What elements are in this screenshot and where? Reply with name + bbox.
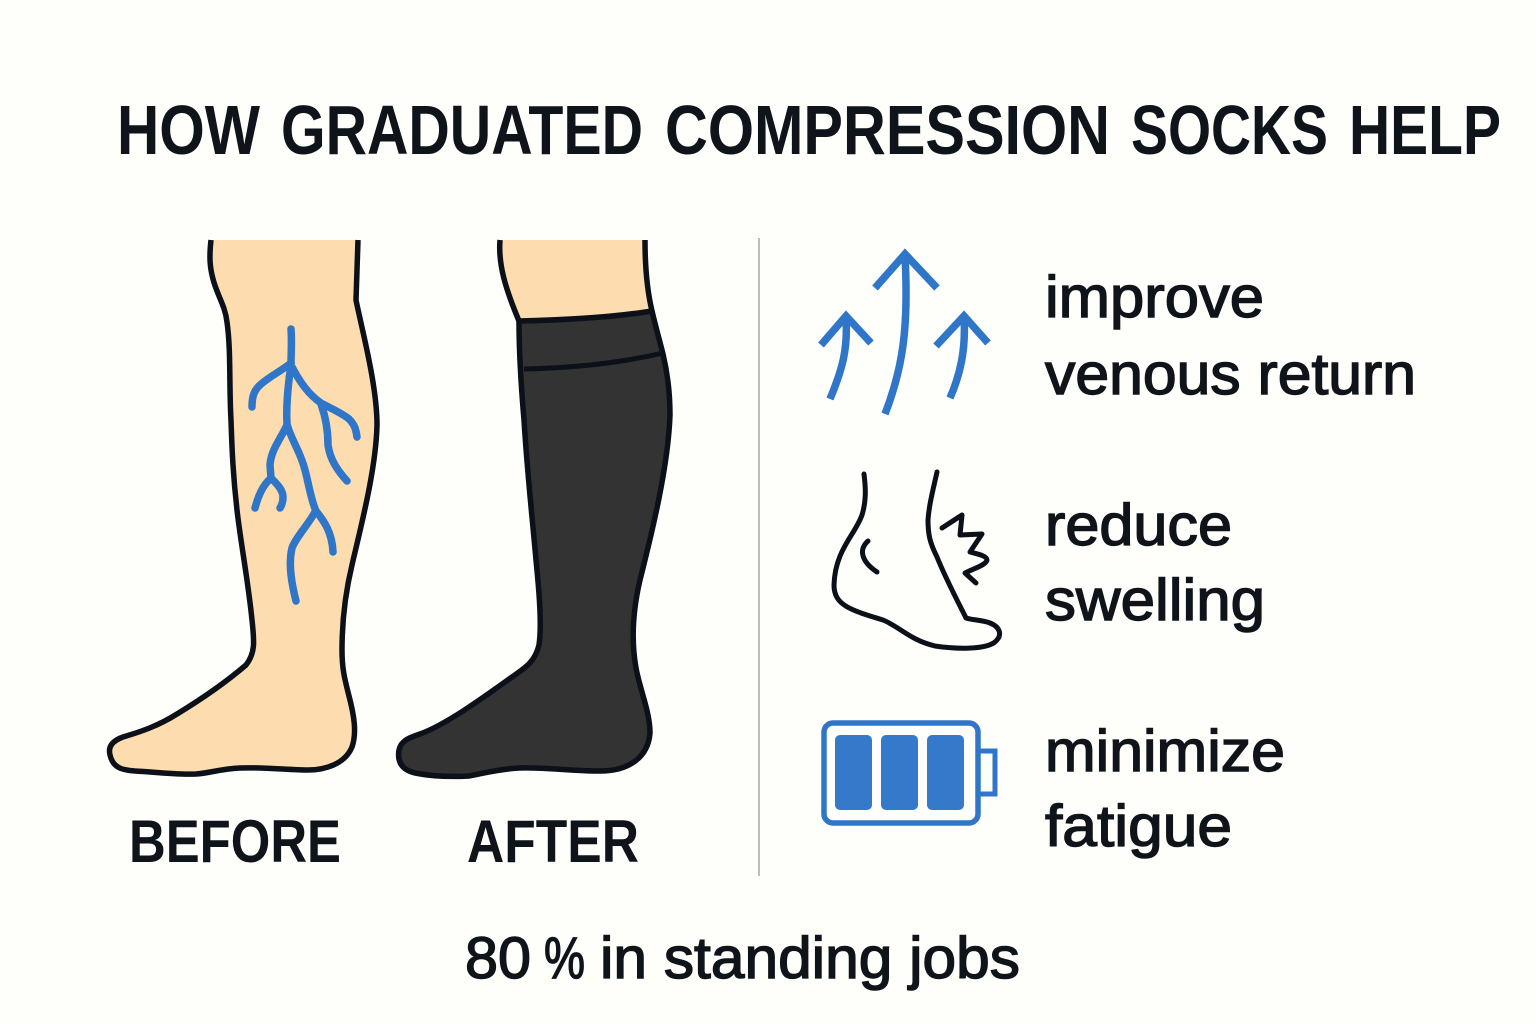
footer statistic: 80 xyxy=(465,926,531,991)
text: improve venous return xyxy=(1045,265,1416,407)
text: reduce swelling xyxy=(1045,493,1265,633)
text: reduce swelling: swelling xyxy=(1045,568,1265,633)
icon: battery xyxy=(824,723,995,823)
icon: swollen foot xyxy=(834,472,1000,648)
title: HOW xyxy=(117,91,260,169)
icon: upward arrows xyxy=(821,254,988,414)
text: minimize fatigue xyxy=(1045,719,1285,859)
title: GRADUATED xyxy=(281,91,643,169)
text: improve venous return: improve xyxy=(1045,265,1264,330)
text: improve venous return: venous return xyxy=(1045,342,1416,407)
title: SOCKS xyxy=(1131,91,1328,169)
text: minimize fatigue: fatigue xyxy=(1045,794,1232,859)
illustration: after leg with sock xyxy=(399,240,670,776)
footer statistic: in standing jobs xyxy=(600,926,1020,991)
footer statistic: % xyxy=(544,926,585,991)
illustration: before leg xyxy=(110,240,377,774)
label: before: BEFORE xyxy=(129,808,341,875)
title: HELP xyxy=(1349,91,1501,169)
icon: varicose veins xyxy=(252,329,357,601)
label: after: AFTER xyxy=(467,808,639,875)
divider xyxy=(758,238,760,876)
title: COMPRESSION xyxy=(665,91,1110,169)
text: minimize fatigue: minimize xyxy=(1045,719,1285,784)
text: reduce swelling: reduce xyxy=(1045,493,1232,558)
title xyxy=(117,91,1501,169)
